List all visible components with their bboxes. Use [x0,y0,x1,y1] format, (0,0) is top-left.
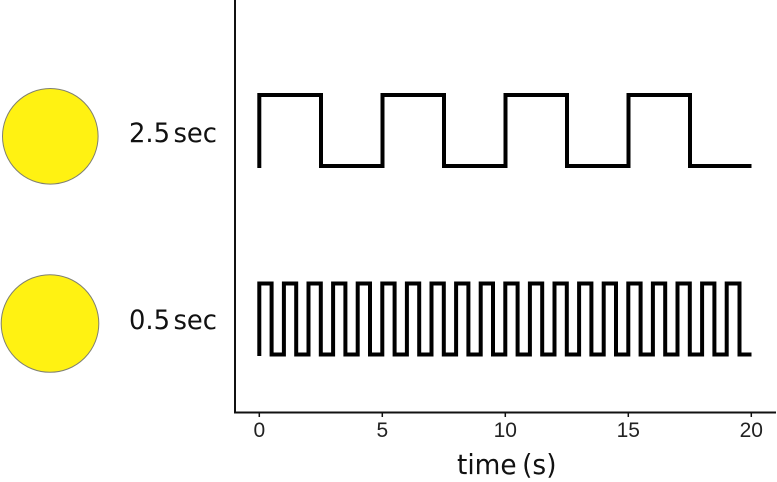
x axis tick labels: 0 [253,419,265,442]
icon: yellow light circle, 2.5 sec [2,88,98,184]
chart axes [235,0,776,417]
label: 2.5 sec: 2.5 sec [129,118,217,149]
square wave: 2.5 sec period [259,95,752,168]
square wave: 0.5 sec period [259,284,752,356]
x axis tick labels: 15 [617,419,640,442]
label: 0.5 sec: 0.5 sec [129,305,217,336]
x axis tick labels [253,419,763,442]
x axis tick labels: 10 [494,419,517,442]
x axis tick labels: 5 [376,419,388,442]
icon: yellow light circle, 0.5 sec [1,275,99,372]
x axis title: time (s) [457,449,556,481]
x axis tick labels: 20 [740,419,763,442]
